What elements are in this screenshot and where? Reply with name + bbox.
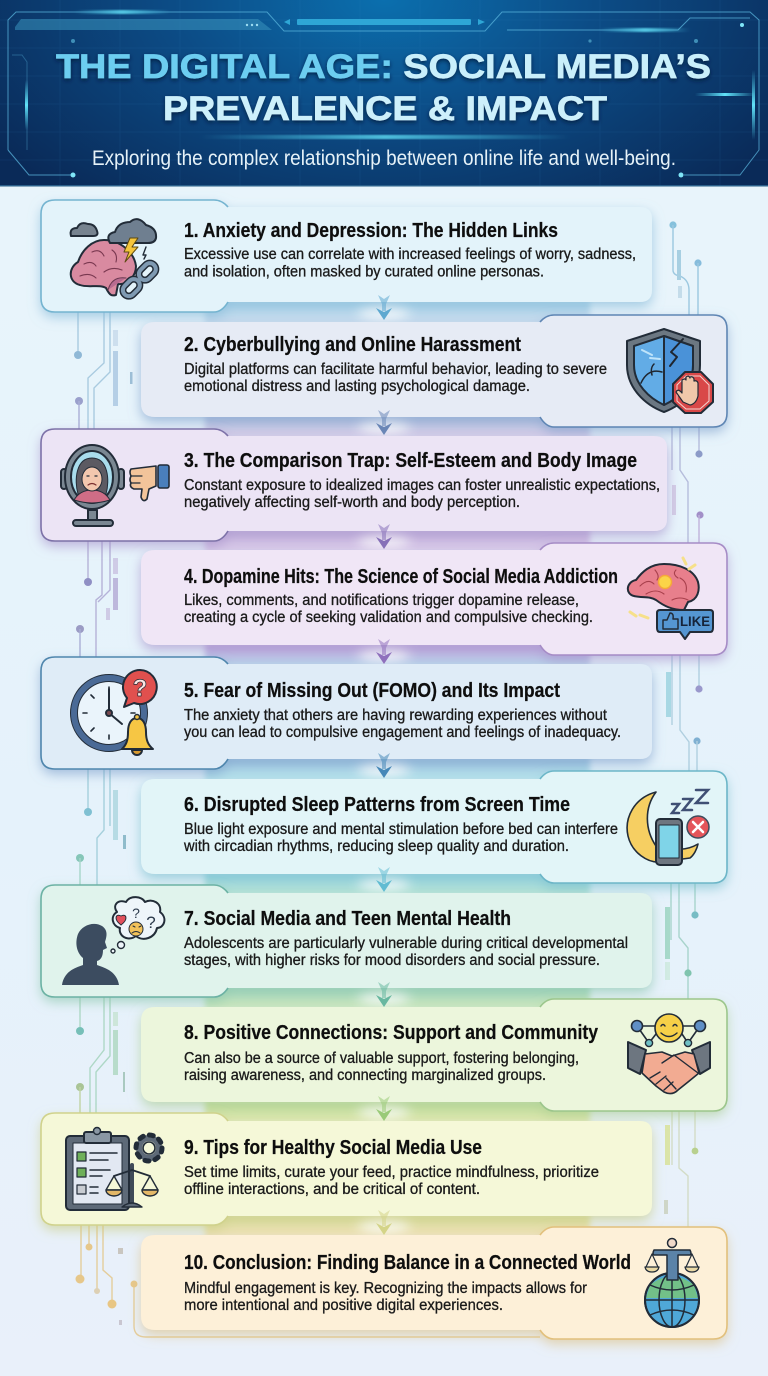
icon: clipboard, gear and scales — [66, 1128, 162, 1210]
icon: network smile and handshake — [628, 1014, 710, 1094]
trace group between cards 1 and 3 — [74, 312, 132, 429]
card 4 text — [184, 592, 593, 626]
trace group above card 2 — [669, 221, 702, 315]
card 9 text: offline interactions, and be critical of content. — [184, 1181, 480, 1198]
card 7: teen mental health — [41, 885, 652, 997]
icon: clock, question bubble and bell: ? — [133, 675, 147, 702]
icon: mirror with sad face and thumbs down — [61, 445, 169, 526]
card 5: FOMO — [41, 657, 652, 769]
card 6 text: with circadian rhythms, reducing sleep quality and duration. — [183, 838, 569, 855]
header top-left plate — [15, 19, 272, 30]
subtitle: Exploring the complex relationship between online life and well-being. — [92, 147, 676, 170]
trace group between cards 2 and 4 — [672, 427, 704, 543]
card 8 text: Can also be a source of valuable support, fostering belonging, — [184, 1050, 579, 1067]
trace group between cards 5 and 7 — [76, 769, 126, 885]
header grid — [0, 0, 768, 186]
card 6: sleep — [141, 771, 727, 883]
card 1: anxiety and depression — [41, 200, 652, 312]
card 3: comparison trap — [41, 429, 667, 541]
icon: clock, question bubble and bell — [70, 670, 157, 755]
card 9 text — [184, 1164, 599, 1198]
trace group between cards 3 and 5 — [76, 541, 118, 657]
icon: glowing brain with like badge — [628, 558, 713, 639]
card 6 text — [183, 821, 618, 855]
arrow 2 to 3 — [376, 410, 392, 435]
card 10 text: more intentional and positive digital experiences. — [184, 1297, 503, 1314]
card 5 title: 5. Fear of Missing Out (FOMO) and Its Impact — [184, 679, 560, 702]
arrow 3 to 4 — [376, 524, 392, 549]
icon: teen silhouette and thought bubble — [62, 897, 164, 985]
arrow 8 to 9 — [376, 1096, 392, 1121]
card 10 title: 10. Conclusion: Finding Balance in a Connected World — [184, 1251, 631, 1274]
arrow 6 to 7 — [376, 867, 392, 892]
card 9 title: 9. Tips for Healthy Social Media Use — [184, 1136, 482, 1159]
card 3 text — [184, 477, 660, 511]
card 9: tips — [41, 1113, 652, 1225]
icon: broken shield with stop hand — [627, 329, 713, 413]
arrows between cards — [376, 295, 392, 1235]
circuit traces: right side — [664, 221, 704, 1227]
header banner — [0, 0, 768, 186]
card 1 text — [184, 246, 636, 280]
card 8: positive connections — [141, 999, 727, 1111]
arrow 5 to 6 — [376, 753, 392, 778]
card 2 text: Digital platforms can facilitate harmful behavior, leading to severe — [184, 361, 607, 378]
title: PREVALENCE & IMPACT — [163, 90, 607, 128]
icon: teen silhouette and thought bubble: ? — [146, 913, 156, 932]
card 10: conclusion — [141, 1227, 727, 1339]
card 8 text: raising awareness, and connecting marginalized groups. — [184, 1067, 546, 1084]
card 5 text: you can lead to compulsive engagement and feelings of inadequacy. — [184, 724, 621, 741]
circuit traces: left side — [74, 312, 540, 1337]
card 7 text — [184, 935, 628, 969]
title: THE DIGITAL AGE: SOCIAL MEDIA’S — [56, 48, 711, 86]
card 2: cyberbullying — [141, 315, 727, 427]
card 1 text: Excessive use can correlate with increased feelings of worry, sadness, — [184, 246, 636, 263]
icon: brain, storm clouds, chain — [71, 219, 158, 299]
card 3 text: Constant exposure to idealized images can foster unrealistic expectations, — [184, 477, 660, 494]
arrow 1 to 2 — [376, 295, 392, 320]
icon: teen silhouette and thought bubble: ? — [132, 905, 140, 921]
card 9 text: Set time limits, curate your feed, practice mindfulness, prioritize — [184, 1164, 599, 1181]
card 6 text: Blue light exposure and mental stimulation before bed can interfere — [184, 821, 618, 838]
trace group between cards 8 and 10 — [664, 1111, 698, 1227]
card 4 text: creating a cycle of seeking validation and compulsive checking. — [184, 609, 593, 626]
card 4 title: 4. Dopamine Hits: The Science of Social Media Addiction — [184, 565, 618, 588]
header frame — [8, 12, 759, 175]
icon: figure with scales on globe — [645, 1238, 699, 1327]
card 2 text: emotional distress and lasting psychological damage. — [184, 378, 530, 395]
card 2 title: 2. Cyberbullying and Online Harassment — [184, 333, 521, 356]
card 10 text: Mindful engagement is key. Recognizing the impacts allows for — [184, 1280, 587, 1297]
tinted bands between card bodies — [205, 300, 590, 1237]
arrow 4 to 5 — [376, 639, 392, 664]
card 2 text — [184, 361, 607, 395]
arrow 9 to 10 — [376, 1210, 392, 1235]
card 1 title: 1. Anxiety and Depression: The Hidden Links — [184, 219, 558, 242]
card 7 title: 7. Social Media and Teen Mental Health — [184, 907, 511, 930]
trace group between cards 6 and 8 — [665, 883, 699, 999]
card 1 text: and isolation, often masked by curated online personas. — [184, 264, 544, 280]
card 4: dopamine hits — [141, 543, 727, 655]
card 6 title: 6. Disrupted Sleep Patterns from Screen Time — [184, 793, 570, 816]
arrow 7 to 8 — [376, 982, 392, 1007]
trace group below card 9 — [76, 1225, 540, 1337]
card 3 text: negatively affecting self-worth and body perception. — [184, 494, 520, 511]
card 4 text: Likes, comments, and notifications trigger dopamine release, — [184, 592, 579, 609]
icon: glowing brain with like badge: LIKE — [680, 614, 710, 629]
card 7 text: Adolescents are particularly vulnerable during critical developmental — [184, 935, 628, 952]
card 5 text — [184, 707, 621, 741]
card 7 text: stages, with higher risks for mood disorders and social pressure. — [184, 952, 600, 969]
card 10 text — [184, 1280, 587, 1314]
header glows — [25, 10, 755, 178]
title — [56, 48, 711, 128]
card 8 text — [184, 1050, 579, 1084]
plate dots — [246, 24, 258, 26]
icon: moon, phone, zzz — [627, 790, 709, 865]
card 8 title: 8. Positive Connections: Support and Community — [184, 1021, 599, 1044]
trace group between cards 7 and 9 — [76, 997, 124, 1113]
trace group between cards 4 and 6 — [666, 655, 703, 771]
card 3 title: 3. The Comparison Trap: Self-Esteem and Body Image — [184, 449, 637, 472]
header centre bar — [284, 19, 485, 25]
card 5 text: The anxiety that others are having rewarding experiences without — [184, 707, 608, 724]
